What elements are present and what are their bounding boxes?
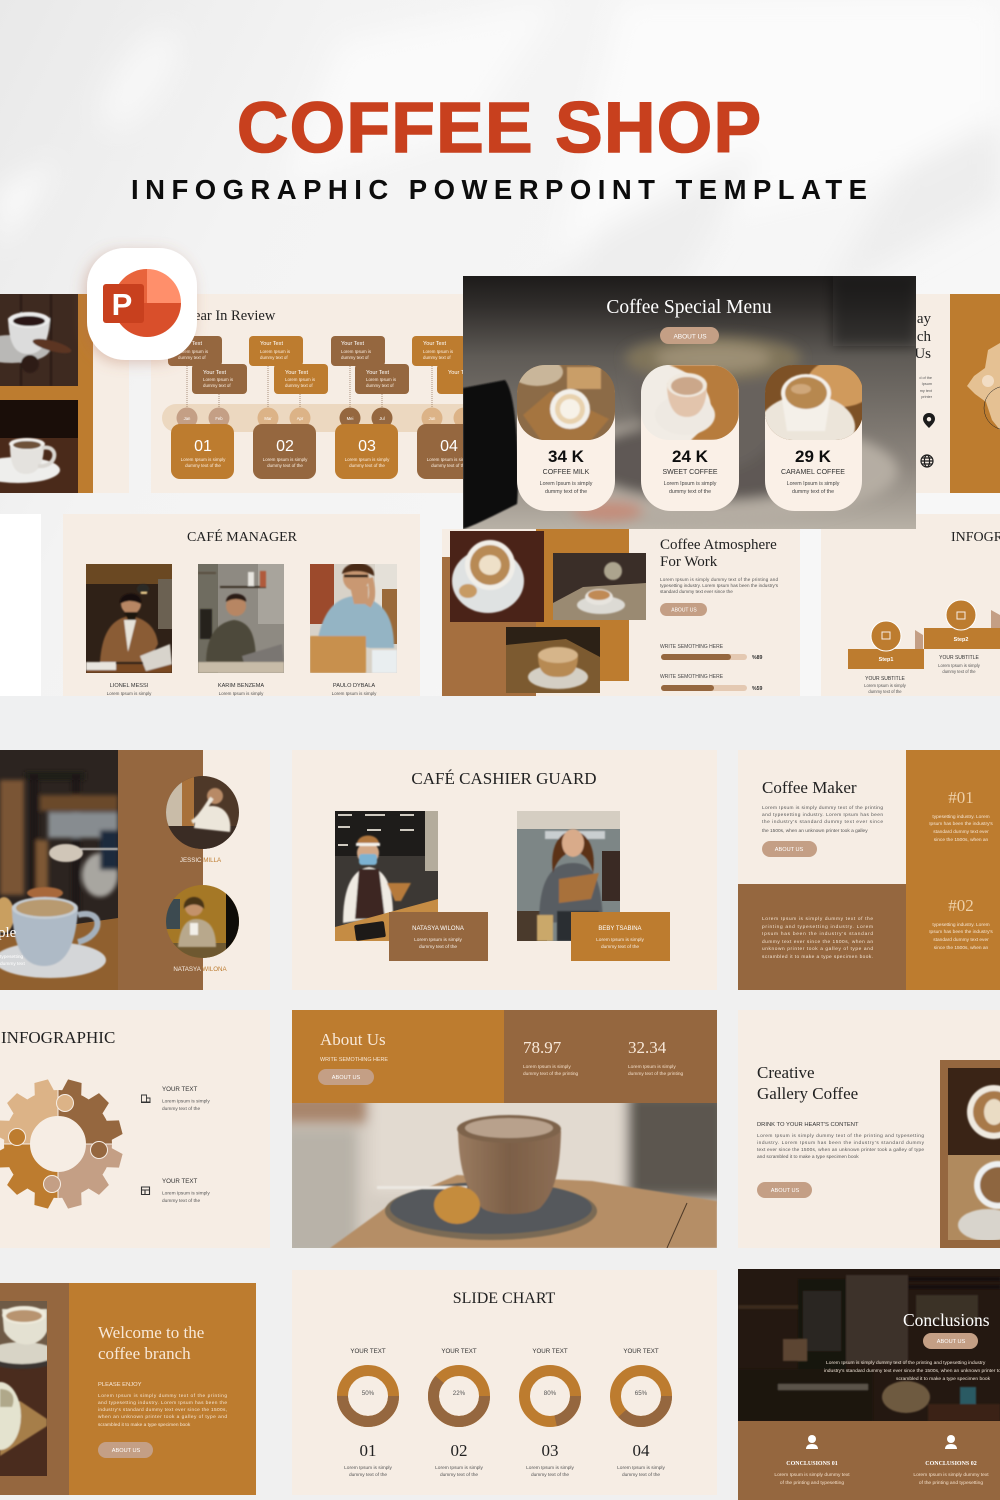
icon: person 2 — [945, 1435, 957, 1449]
panel: reach us slide — [900, 294, 1000, 493]
step 2: Lorem Ipsum is simply — [938, 663, 981, 668]
event cards: Your Text — [179, 341, 202, 347]
photo: manager three — [310, 564, 397, 673]
body text: Lorem Ipsum is simply dummy text of the printing and — [660, 577, 778, 582]
stat 78.97: 78.97 — [523, 1038, 562, 1057]
donut 02: Lorem Ipsum is simply — [435, 1465, 483, 1471]
donut 01: dummy text of the — [349, 1472, 387, 1478]
button — [757, 1182, 812, 1198]
event cards: Lorem Ipsum is — [260, 349, 291, 354]
donut 04 — [616, 1348, 666, 1478]
event cards: Your Text — [260, 341, 283, 347]
event cards: Your Text — [341, 341, 364, 347]
heading: ay — [917, 311, 931, 327]
stat 32.34: dummy text of the printing — [628, 1071, 684, 1077]
text block 2 — [162, 1178, 210, 1204]
body text: Ipsum — [922, 382, 932, 386]
names: PAULO DYBALA — [333, 683, 375, 689]
quarter cards: Lorem Ipsum is simply — [263, 457, 308, 462]
menu card: sweet coffee: SWEET COFFEE — [662, 469, 718, 476]
subtitle: INFOGRAPHIC POWERPOINT TEMPLATE — [131, 174, 867, 205]
month markers: Apr — [297, 416, 304, 421]
donut 04: dummy text of the — [622, 1472, 660, 1478]
portrait: Jessic — [166, 776, 239, 849]
photo: cashier with tablet — [517, 811, 620, 941]
donut 03: dummy text of the — [531, 1472, 569, 1478]
body text: industry's standard dummy text ever since the 1500s, — [98, 1407, 227, 1413]
month markers: Jan — [184, 416, 191, 421]
menu card: caramel coffee — [765, 365, 862, 511]
lower text block — [762, 916, 873, 960]
body text: the 1500s, when an unknown printer took a galley — [762, 828, 868, 834]
text on photo: dummy text — [0, 961, 25, 967]
caption: Beby Tsabina: BEBY TSABINA — [598, 926, 642, 932]
quarter cards: 01 — [194, 438, 212, 455]
month markers — [176, 408, 474, 428]
panel: coffee maker — [738, 750, 1000, 990]
subheading: WRITE SEMOTHING HERE — [320, 1057, 388, 1063]
body text: typesetting industry. Lorem Ipsum has been the industry's — [660, 583, 779, 588]
text block 1 — [162, 1086, 210, 1112]
lower text block: dummy text ever since the 1500s, when an — [762, 939, 873, 945]
heading: CAFÉ CASHIER GUARD — [411, 769, 597, 788]
photo: manager two — [198, 564, 284, 673]
body text — [757, 1133, 925, 1160]
quarter cards: 03 — [358, 438, 376, 455]
event cards: dummy text of — [260, 355, 288, 360]
heading — [757, 1063, 858, 1103]
item 02 — [929, 896, 993, 951]
donut 04: 65% — [635, 1390, 648, 1397]
body text — [660, 577, 779, 594]
progress bars — [660, 644, 762, 692]
donut 02: 22% — [453, 1390, 466, 1397]
text block 1: YOUR TEXT — [162, 1086, 198, 1093]
heading: Conclusions — [903, 1310, 990, 1330]
month markers: Feb — [215, 416, 223, 421]
heading: ch — [917, 329, 931, 345]
caption: Natasya Wilona: Lorem Ipsum is simply — [414, 937, 462, 943]
stat 32.34: Lorem Ipsum is simply — [628, 1064, 676, 1070]
stat 32.34: 32.34 — [628, 1038, 667, 1057]
icon: powerpoint logo — [87, 248, 197, 360]
photo: cup on saucer — [292, 1103, 717, 1248]
step 1: YOUR SUBTITLE — [865, 676, 906, 682]
heading: Creative — [757, 1063, 815, 1082]
heading — [98, 1323, 204, 1363]
donut 02 — [434, 1348, 484, 1478]
text block 2: YOUR TEXT — [162, 1178, 198, 1185]
subheading: PLEASE ENJOY — [98, 1382, 142, 1388]
panel: welcome to the coffee branch — [0, 1283, 256, 1495]
button: ABOUT US — [671, 608, 697, 614]
menu card: coffee milk: 34 K — [548, 447, 585, 466]
item 01: standard dummy text ever — [933, 829, 989, 835]
quarter cards: Lorem Ipsum is simply — [427, 457, 472, 462]
donut 01: YOUR TEXT — [350, 1348, 386, 1355]
panel: slide chart — [292, 1270, 717, 1495]
menu card: coffee milk: COFFEE MILK — [543, 469, 590, 476]
panel: cafe manager: Lorem Ipsum is simply — [107, 691, 152, 696]
quarter cards: dummy text of the — [267, 463, 303, 468]
item 01: typesetting industry. Lorem — [932, 814, 990, 820]
caption: Natasya Wilona: dummy text of the — [419, 944, 457, 950]
heading — [660, 537, 777, 570]
heading: Welcome to the — [98, 1323, 204, 1342]
panel: cafe cashier guard — [292, 750, 717, 990]
lower text block: printing and typesetting industry. Lorem — [762, 924, 873, 930]
panel: cafe manager: Lorem Ipsum is simply — [219, 691, 264, 696]
photo: latte on table — [506, 627, 600, 693]
menu card: coffee milk — [517, 365, 615, 511]
lower text block: Ipsum has been the industry's standard — [762, 931, 873, 937]
heading: Gallery Coffee — [757, 1084, 858, 1103]
quarter cards: Lorem Ipsum is simply — [181, 457, 226, 462]
photo: cashier with mask — [335, 811, 438, 941]
heading: coffee branch — [98, 1344, 191, 1363]
lower text block: Lorem Ipsum is simply dummy text of the — [762, 916, 873, 922]
donut 01: 01 — [360, 1441, 376, 1460]
progress bars: WRITE SEMOTHING HERE — [660, 674, 724, 680]
body text: when an unknown printer took a galley of type and — [98, 1414, 227, 1420]
button — [923, 1333, 978, 1349]
donut 04: YOUR TEXT — [623, 1348, 659, 1355]
body text: printer — [921, 395, 933, 399]
donut 03: YOUR TEXT — [532, 1348, 568, 1355]
heading: Coffee Maker — [762, 778, 857, 797]
photo: latte on wooden tray — [517, 365, 615, 440]
body text: d of the — [919, 376, 932, 380]
event cards: Lorem Ipsum is — [178, 349, 209, 354]
donut 04: Lorem Ipsum is simply — [617, 1465, 665, 1471]
panel: about us — [282, 1010, 727, 1258]
panel: cafe manager — [63, 514, 420, 696]
heading: About Us — [320, 1030, 386, 1049]
panel: year in review timeline — [151, 294, 491, 493]
event cards: Lorem Ipsum is — [423, 349, 454, 354]
button: ABOUT US — [775, 847, 804, 853]
icon: office — [142, 1187, 150, 1194]
icon: person 1 — [806, 1435, 818, 1449]
stat 32.34 — [628, 1038, 684, 1077]
menu card: sweet coffee: dummy text of the — [669, 489, 711, 495]
panel: cafe manager: Lorem Ipsum is simply — [332, 691, 377, 696]
quarter cards: dummy text of the — [349, 463, 385, 468]
item 01: since the 1500s, when an — [934, 837, 989, 843]
step 2 — [924, 600, 1000, 674]
icon: location pin — [923, 413, 935, 428]
name: Natasya Wilona: NATASYA WILONA — [173, 966, 228, 973]
photo: coffee with flowers — [553, 553, 646, 620]
panel: left edge white slide — [0, 514, 41, 696]
timeline band — [162, 404, 482, 432]
button — [660, 327, 719, 344]
item: conclusions 01: CONCLUSIONS 01 — [786, 1461, 838, 1467]
menu card: caramel coffee: dummy text of the — [792, 489, 834, 495]
item: conclusions 01 — [774, 1461, 850, 1486]
item 02: standard dummy text ever — [933, 937, 989, 943]
text block 1: dummy text of the — [162, 1106, 200, 1112]
button — [762, 841, 817, 857]
icon: building — [141, 1095, 150, 1102]
names — [110, 683, 375, 689]
step 1: dummy text of the — [868, 689, 902, 694]
panel: conclusions — [738, 1269, 1000, 1500]
heading: Year In Review — [185, 308, 276, 324]
menu card: sweet coffee — [641, 365, 739, 511]
button: ABOUT US — [771, 1188, 800, 1194]
menu card: caramel coffee: Lorem Ipsum is simply — [787, 481, 840, 487]
event cards: Your Text — [423, 341, 446, 347]
panel: coffee team portraits — [0, 750, 270, 990]
body text: the industry's standard dummy text ever since — [762, 819, 883, 825]
menu card: sweet coffee: 24 K — [672, 447, 709, 466]
text on photo: typesetting — [0, 954, 24, 960]
body text: standard dummy text ever since the — [660, 589, 733, 594]
connector lines — [187, 366, 432, 408]
donut 01: 50% — [362, 1390, 375, 1397]
month markers: Jul — [379, 416, 385, 421]
names: KARIM BENZEMA — [218, 683, 264, 689]
body text: Lorem Ipsum is simply dummy text of the printing — [762, 805, 883, 811]
step 2: YOUR SUBTITLE — [939, 655, 980, 661]
body text: Lorem Ipsum is simply dummy text of the printing and typesetting — [757, 1133, 924, 1139]
caption: Natasya Wilona — [389, 912, 488, 961]
body text — [762, 805, 883, 834]
item 02: #02 — [948, 896, 974, 915]
quarter cards: dummy text of the — [431, 463, 467, 468]
caption: Beby Tsabina: Lorem Ipsum is simply — [596, 937, 644, 943]
photo: latte top view — [450, 531, 544, 622]
text on photo — [0, 925, 25, 967]
body text: Lorem Ipsum is simply dummy text of the printing — [98, 1393, 227, 1399]
item 01: Ipsum has been the industry's — [929, 821, 993, 827]
menu card: coffee milk: Lorem Ipsum is simply — [540, 481, 593, 487]
portrait: Natasya — [166, 885, 239, 958]
photo: manager one — [86, 564, 172, 673]
name: Jessic Milla: JESSIC MILLA — [180, 857, 222, 864]
stat 78.97: dummy text of the printing — [523, 1071, 579, 1077]
names: LIONEL MESSI — [110, 683, 149, 689]
body text: and typesetting industry. Lorem Ipsum has been — [762, 812, 883, 818]
quarter cards: dummy text of the — [185, 463, 221, 468]
step 2: Step2 — [954, 637, 968, 643]
photo: coffee cup with spoon — [0, 750, 118, 990]
button — [98, 1442, 153, 1458]
body text — [824, 1360, 1000, 1382]
button: ABOUT US — [673, 334, 707, 340]
step 2: dummy text of the — [942, 669, 976, 674]
donut 04: 04 — [632, 1441, 650, 1460]
menu card: sweet coffee: Lorem Ipsum is simply — [664, 481, 717, 487]
lower text block: scrambled it to make a type specimen book. — [762, 954, 873, 960]
quarter cards: 04 — [440, 438, 458, 455]
photo: cup on wood table — [0, 400, 78, 493]
item 01: #01 — [948, 788, 974, 807]
button: ABOUT US — [112, 1448, 141, 1454]
panel: creative gallery coffee — [738, 1010, 1000, 1248]
item: conclusions 02: CONCLUSIONS 02 — [925, 1461, 977, 1467]
event cards: dummy text of — [178, 355, 206, 360]
text block 2: dummy text of the — [162, 1198, 200, 1204]
month markers: Mar — [264, 416, 272, 421]
heading: CAFÉ MANAGER — [187, 528, 298, 545]
body text — [98, 1393, 227, 1428]
heading: Coffee Special Menu — [606, 297, 772, 318]
quarter cards: 02 — [276, 438, 294, 455]
body text: Lorem Ipsum is simply dummy text of the printing and typesetting industry — [826, 1360, 986, 1366]
step 1: Step1 — [879, 657, 893, 663]
photo: caramel coffee cup — [765, 365, 862, 440]
photo: cup on wood — [948, 1155, 1000, 1240]
stat 78.97: Lorem Ipsum is simply — [523, 1064, 571, 1070]
lower text block: unknown printer took a galley of type and — [762, 946, 873, 952]
item 02: Ipsum has been the industry's — [929, 929, 993, 935]
button: ABOUT US — [332, 1075, 361, 1081]
body text: scrambled it to make a type specimen book — [98, 1422, 191, 1428]
button: ABOUT US — [937, 1339, 966, 1345]
donut 03: Lorem Ipsum is simply — [526, 1465, 574, 1471]
title: COFFEE SHOP — [237, 89, 761, 168]
event cards: dummy text of — [423, 355, 451, 360]
month markers: Mei — [347, 416, 353, 421]
menu card: caramel coffee: 29 K — [795, 447, 832, 466]
panel: coffee photos slide — [0, 294, 129, 493]
donut 03 — [524, 1348, 576, 1478]
panel: infographic steps — [821, 514, 1000, 696]
icon: globe — [921, 455, 933, 467]
donut 01: Lorem Ipsum is simply — [344, 1465, 392, 1471]
photo: cups on burlap — [0, 1301, 47, 1476]
donut 03: 80% — [544, 1390, 557, 1397]
heading — [914, 311, 931, 362]
quarter cards: Lorem Ipsum is simply — [345, 457, 390, 462]
caption: Natasya Wilona: NATASYA WILONA — [412, 926, 464, 932]
quarter cards — [171, 424, 480, 479]
body text: and typesetting industry. Lorem Ipsum has been the — [98, 1400, 227, 1406]
button — [318, 1069, 374, 1085]
month markers: Jun — [429, 416, 436, 421]
hero background photo — [463, 276, 916, 529]
event cards — [168, 336, 491, 394]
item: conclusions 01: of the printing and typesetting — [780, 1480, 844, 1486]
text block 1: Lorem Ipsum is simply — [162, 1098, 210, 1104]
photo: cup on saucer — [641, 365, 739, 440]
event cards: Your Text — [366, 370, 389, 376]
item: conclusions 02: of the printing and typesetting — [919, 1480, 983, 1486]
body text — [919, 376, 933, 399]
donut 02: YOUR TEXT — [441, 1348, 477, 1355]
event cards: dummy text of — [366, 383, 394, 388]
button — [660, 603, 707, 616]
text block 2: Lorem Ipsum is simply — [162, 1190, 210, 1196]
event cards: Your Text — [448, 370, 471, 376]
body text: text ever since the 1500s, when an unknown printer took a galley of type — [757, 1147, 924, 1153]
event cards: Lorem Ipsum is — [366, 377, 397, 382]
progress bars: WRITE SEMOTHING HERE — [660, 644, 724, 650]
gear chart — [0, 1078, 124, 1210]
item: conclusions 01: Lorem Ipsum is simply dummy text — [774, 1472, 850, 1478]
item 02: typesetting industry. Lorem — [932, 922, 990, 928]
item 01 — [929, 788, 993, 843]
donut 02: 02 — [450, 1441, 468, 1460]
map — [967, 343, 1000, 430]
event cards: Your Text — [203, 370, 226, 376]
event cards: dummy text of — [203, 383, 231, 388]
panel: coffee atmosphere — [442, 529, 800, 696]
event cards: Your Text — [285, 370, 308, 376]
photo: dark cafe interior — [738, 1269, 1000, 1421]
heading: Us — [914, 346, 931, 362]
step 1: Lorem Ipsum is simply — [864, 683, 907, 688]
step 1 — [848, 621, 924, 694]
body text: scrambled it to make a type specimen book — [896, 1376, 991, 1382]
panel: gear infographic — [0, 1010, 270, 1248]
icon: powerpoint logo: P — [112, 287, 132, 322]
donut 02: dummy text of the — [440, 1472, 478, 1478]
body text: and scrambled it to make a type specimen book — [757, 1154, 859, 1160]
stat 78.97 — [523, 1038, 579, 1077]
donut 01 — [342, 1348, 394, 1478]
event cards: Lorem Ipsum is — [341, 349, 372, 354]
photo: latte art — [948, 1068, 1000, 1155]
progress bars: %59 — [752, 686, 762, 692]
donut 03: 03 — [542, 1441, 558, 1460]
panel: coffee special menu hero slide — [463, 276, 916, 529]
item: conclusions 02 — [913, 1461, 989, 1486]
event cards: dummy text of — [285, 383, 313, 388]
photo: dark coffee on wood — [0, 294, 78, 386]
menu card: coffee milk: dummy text of the — [545, 489, 587, 495]
menu card: caramel coffee: CARAMEL COFFEE — [781, 469, 845, 476]
heading: SLIDE CHART — [453, 1290, 556, 1307]
event cards: Lorem Ipsum is — [203, 377, 234, 382]
progress bars: %89 — [752, 655, 762, 661]
body text: industry. Lorem Ipsum has been the industry's standard dummy — [757, 1140, 925, 1146]
event cards: dummy text of — [341, 355, 369, 360]
item 02: since the 1500s, when an — [934, 945, 989, 951]
caption: Beby Tsabina — [571, 912, 670, 961]
heading: For Work — [660, 554, 718, 570]
caption: Beby Tsabina: dummy text of the — [601, 944, 639, 950]
heading: Coffee Atmosphere — [660, 537, 777, 553]
heading: INFOGRAPHIC — [1, 1028, 115, 1047]
item: conclusions 02: Lorem Ipsum is simply dummy text — [913, 1472, 989, 1478]
body text: my text — [920, 389, 933, 393]
subheading: DRINK TO YOUR HEART'S CONTENT — [757, 1122, 859, 1128]
event cards: Lorem Ipsum is — [285, 377, 316, 382]
